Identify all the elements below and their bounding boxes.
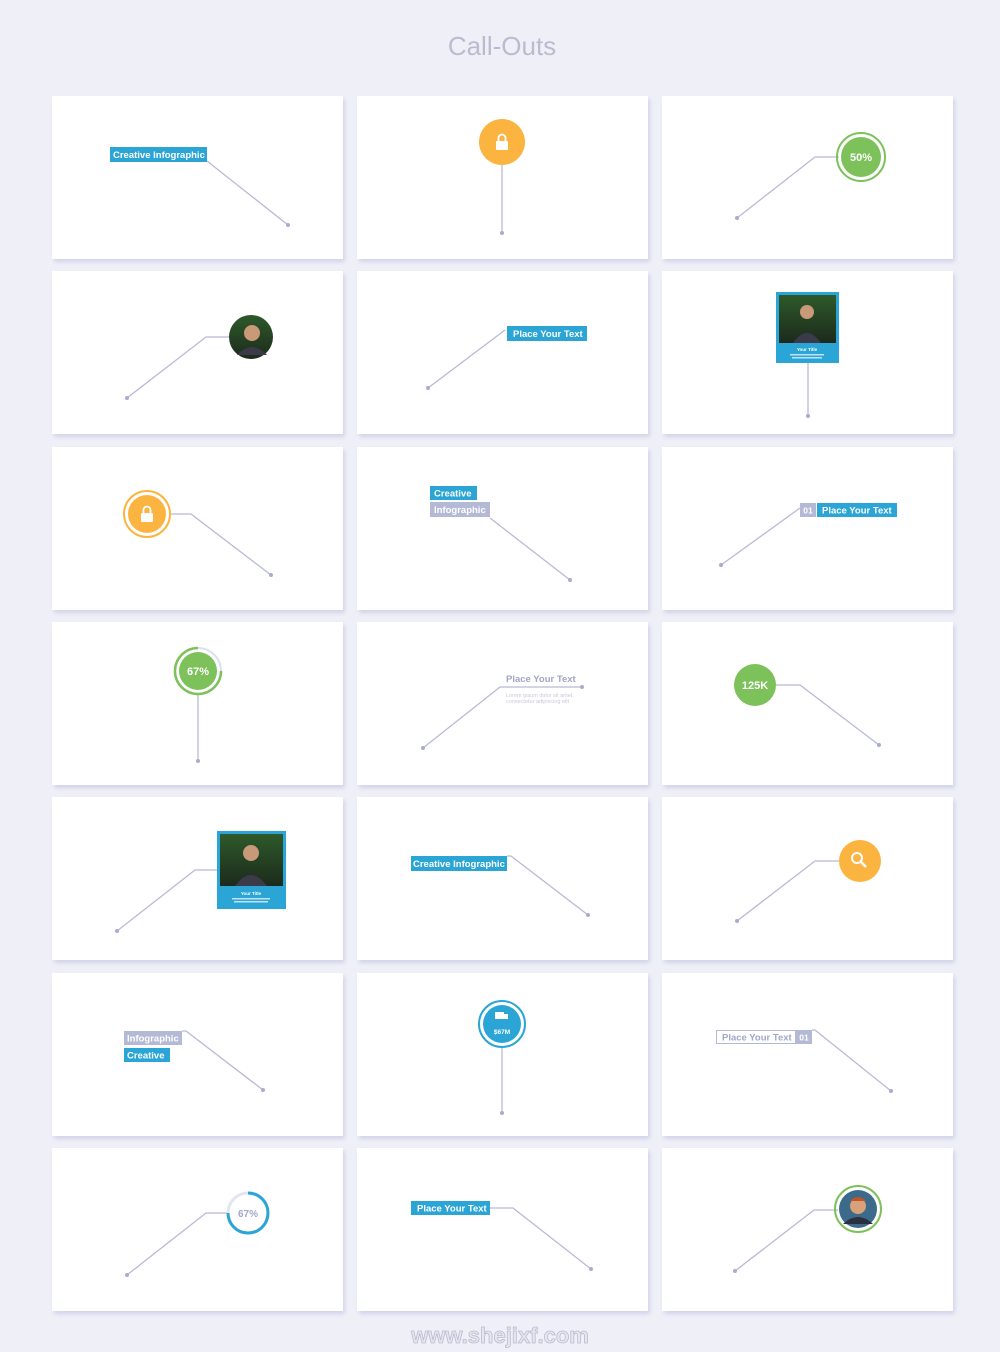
callout 20: label: Place Your Text (417, 1204, 488, 1214)
callout 10: 67% ring (175, 648, 221, 694)
callout 6: photo card: Your Title (797, 347, 818, 352)
callout 5: label: Place Your Text (513, 329, 584, 340)
callout 7: lock ring (124, 491, 170, 537)
callout 2: lock circle (479, 119, 525, 165)
callout 11: text block: Lorem ipsum dolor sit amet, (506, 693, 574, 699)
title: Call-Outs (448, 31, 556, 61)
callout 8: stacked labels: Creative (434, 488, 472, 500)
callout 16: stacked labels: Infographic (127, 1034, 179, 1044)
callout 13: photo card: Your Title (241, 891, 262, 896)
callout 16: stacked labels: Creative (127, 1050, 164, 1062)
callout 10: 67% ring: 67% (187, 666, 209, 678)
callout 19: 67% progress ring (228, 1193, 268, 1233)
callout 17: truck circle (479, 1001, 525, 1047)
callout 12: 125K (734, 664, 776, 706)
callout 18: outlined label: 01 (799, 1032, 809, 1042)
callout 17: truck circle: $67M (494, 1029, 510, 1036)
callout 18: outlined label (716, 1030, 812, 1044)
callout 8: stacked labels (430, 486, 490, 517)
callout 16: stacked labels (124, 1031, 182, 1062)
callout 11: text block: consectetur adipiscing elit. (506, 699, 571, 705)
watermark: www.shejixf.com (410, 1323, 589, 1348)
callout 4: photo circle (229, 315, 273, 359)
callout 11: text block (506, 674, 577, 705)
callout 9: numbered label (800, 503, 897, 517)
callout 13: photo card (217, 831, 286, 909)
callout 18: outlined label: Place Your Text (722, 1032, 793, 1044)
callout 11: text block: Place Your Text (506, 674, 577, 685)
callout 12: 125K: 125K (742, 680, 768, 692)
callout 20: label (411, 1201, 490, 1215)
callout 1: label: Creative Infographic (113, 150, 205, 161)
callout 5: label (507, 326, 587, 341)
callout 1: label (110, 147, 207, 162)
callout 14: label: Creative Infographic (413, 859, 505, 870)
callout 8: stacked labels: Infographic (434, 505, 486, 516)
callout 3: 50% (837, 133, 885, 181)
callout 15: search circle (839, 840, 881, 882)
callout 21: photo ring (835, 1186, 881, 1232)
callout 6: photo card (776, 292, 839, 363)
callout 9: numbered label: 01 (803, 506, 813, 516)
callout 9: numbered label: Place Your Text (822, 506, 893, 516)
callout 19: 67% progress ring: 67% (238, 1209, 258, 1220)
callout 3: 50%: 50% (850, 152, 872, 164)
